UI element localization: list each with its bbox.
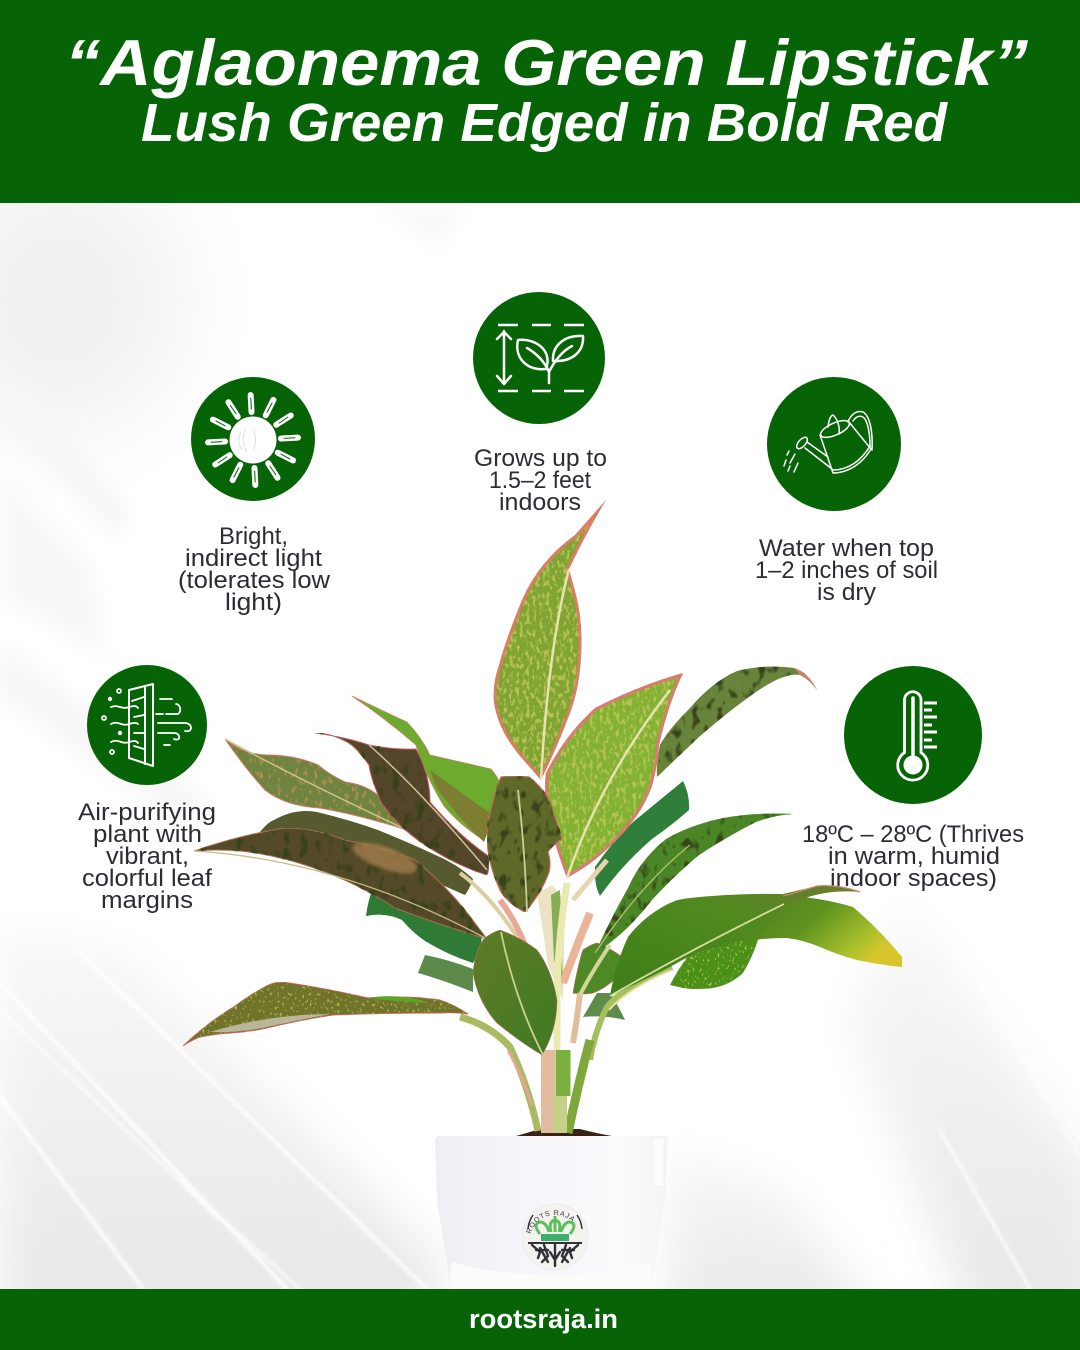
caption: air purifying: colorful leaf [82, 865, 212, 892]
caption: water: 1–2 inches of soil [755, 557, 938, 584]
stems [460, 860, 672, 1133]
icon: watering can [767, 377, 901, 511]
caption: air purifying: margins [101, 887, 193, 914]
caption: light [178, 523, 330, 616]
logo sticker on pot [522, 1204, 588, 1270]
icon: sun [191, 377, 315, 501]
plant [183, 500, 902, 1136]
caption: water [755, 535, 938, 606]
title [65, 26, 1029, 153]
caption: height [474, 445, 607, 516]
caption: water: Water when top [759, 535, 934, 562]
footer band [0, 1289, 1080, 1350]
caption: temperature: in warm, humid [828, 843, 1000, 870]
caption: temperature [802, 821, 1024, 892]
header band [0, 0, 1080, 203]
icon: plant height [473, 292, 605, 424]
caption: height: 1.5–2 feet [489, 467, 591, 494]
caption: height: indoors [499, 489, 581, 516]
website label: rootsraja.in [469, 1304, 618, 1334]
caption: air purifying: plant with [93, 821, 202, 848]
caption: height: Grows up to [474, 445, 607, 472]
soil [516, 1129, 612, 1136]
caption: temperature: indoor spaces) [830, 865, 997, 892]
caption: light: (tolerates low [178, 567, 330, 594]
icon: thermometer [844, 666, 982, 804]
front leaves [473, 500, 860, 1055]
caption: air purifying: Air-purifying [78, 799, 216, 826]
pot [435, 1136, 668, 1279]
caption: light: indirect light [185, 545, 322, 572]
caption: air purifying: vibrant, [106, 843, 189, 870]
caption: temperature: 18ºC – 28ºC (Thrives [802, 821, 1024, 848]
caption: air purifying [78, 799, 216, 914]
caption: water: is dry [817, 579, 877, 606]
title: “Aglaonema Green Lipstick” [65, 26, 1029, 99]
subtitle: Lush Green Edged in Bold Red [141, 93, 948, 153]
icon: air purifier [87, 665, 207, 785]
caption: light: light) [225, 589, 282, 616]
caption: light: Bright, [219, 523, 288, 550]
back leaves [183, 667, 902, 1046]
logo sticker on pot: ROOTS RAJA [526, 1210, 574, 1234]
